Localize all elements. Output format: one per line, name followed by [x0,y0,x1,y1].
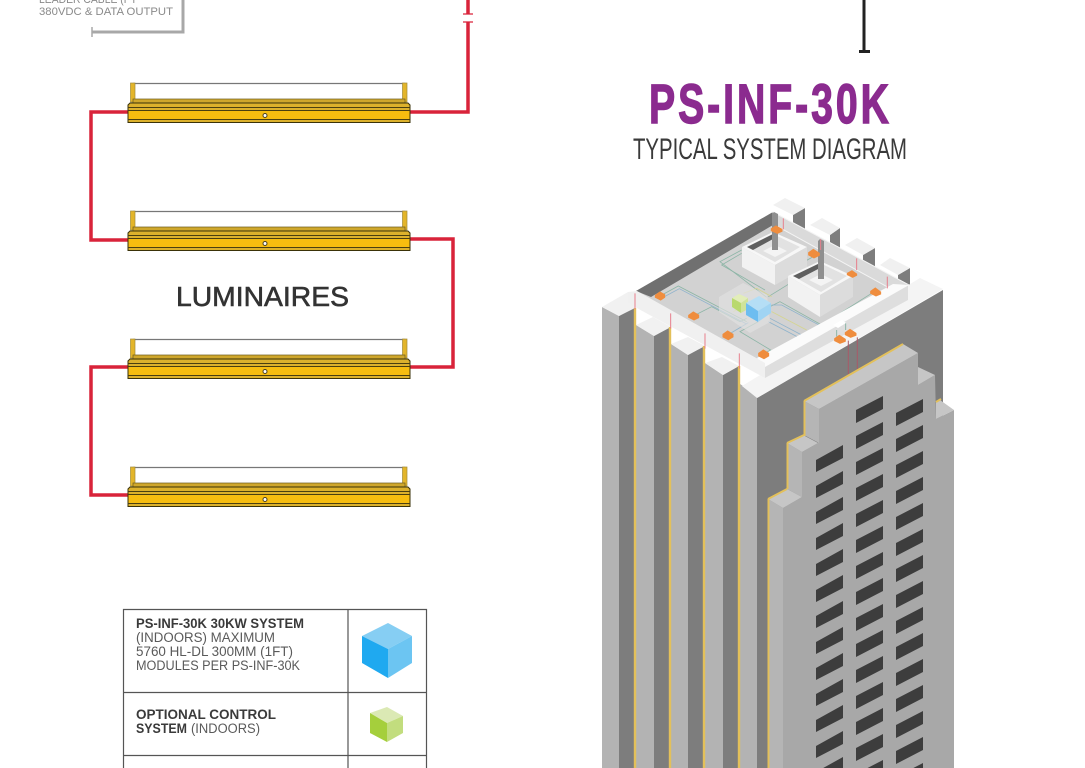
icon: blue cube [362,623,412,678]
legend text: optional control system: OPTIONAL CONTROL [136,707,276,722]
windows [816,396,923,768]
red power and data cable [91,0,473,495]
legend text: PS-INF-30K system: (INDOORS) MAXIMUM [136,630,275,645]
tower step caps [768,344,954,508]
rooftop system cube [746,296,771,322]
subtitle: TYPICAL SYSTEM DIAGRAM [633,133,907,166]
luminaire 3 [128,339,410,378]
junction box on parapet [833,320,846,328]
luminaire 2 [128,211,410,250]
front-right parapet [765,284,908,378]
tower stepped side strips [768,401,819,768]
back-left parapet [636,212,773,297]
parapet cable crossings [635,218,887,374]
title: PS-INF-30K [649,73,892,136]
roof floor [636,212,908,363]
rooftop unit 2 [788,239,853,317]
legend text: PS-INF-30K system: MODULES PER PS-INF-30K [136,658,300,673]
rooftop unit 1 [742,212,807,285]
top mast foot [859,0,870,52]
left facade columns [602,292,757,768]
legend text: optional control system: SYSTEM [136,721,187,736]
right facade [757,290,943,768]
callout: leader cable output [39,0,183,37]
legend text: optional control system [136,707,276,736]
luminaire 1 [128,83,410,122]
cables [660,250,872,354]
callout: leader cable output: 380VDC & DATA OUTPUT [39,6,173,18]
back-right parapet [773,212,909,290]
luminaires heading: LUMINAIRES [176,281,349,312]
tower yellow edge lines [768,344,941,768]
tower windowed face [783,353,954,768]
icon: green cube [370,707,403,742]
legend text: PS-INF-30K system [136,616,304,673]
rooftop [628,212,909,378]
rooftop control cube [732,294,748,313]
front tower section [768,344,954,768]
orange connectors [655,226,881,359]
isometric building [602,198,954,768]
legend text: optional control system: (INDOORS) [191,721,260,736]
front-right parapet top [757,284,909,367]
legend table [124,610,426,768]
rear rooftop pillars [773,198,910,290]
front-left parapet [628,291,765,378]
translucent cabinet outline [719,283,770,333]
legend text: PS-INF-30K system: 5760 HL-DL 300MM (1FT) [136,644,293,659]
right facade top ledge [742,278,943,398]
luminaire 4 [128,467,410,506]
legend text: PS-INF-30K system: PS-INF-30K 30KW SYSTEM [136,616,304,631]
